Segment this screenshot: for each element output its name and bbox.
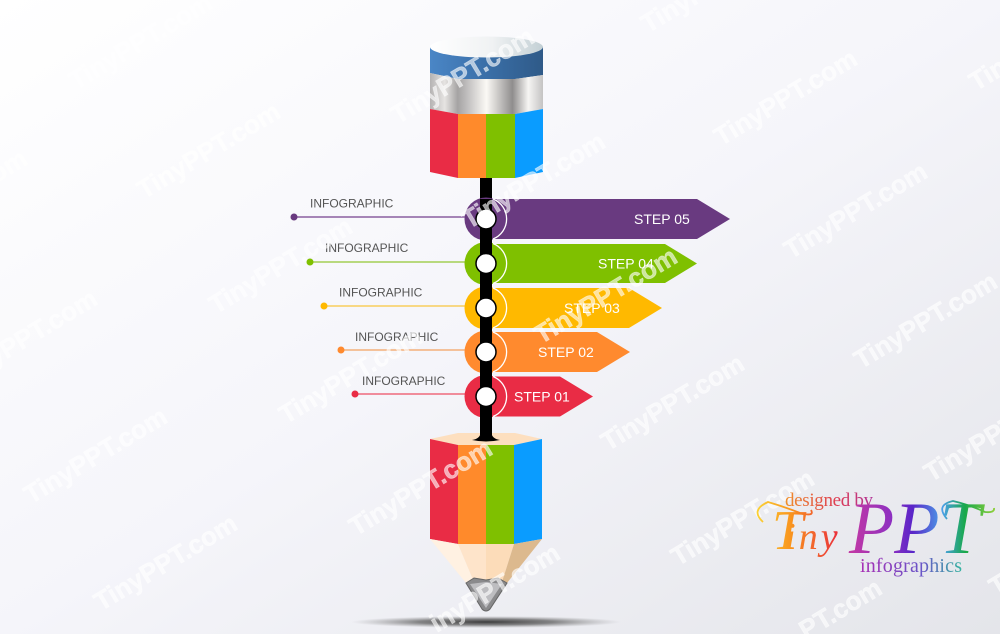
badge arc — [493, 199, 507, 239]
eraser blue band — [430, 47, 543, 79]
label: INFOGRAPHIC — [339, 286, 423, 300]
badge — [464, 286, 508, 330]
badge arc — [493, 376, 507, 416]
timeline nodes — [476, 209, 496, 406]
step 01 row — [352, 374, 593, 418]
Tiny wordmark: Tiny — [772, 500, 841, 562]
timeline spine over badges — [480, 199, 492, 435]
designed by logo — [758, 488, 994, 577]
step 03 row — [320, 286, 662, 330]
badge arc — [493, 288, 507, 328]
watermark pattern: TinyPPT.com — [18, 401, 172, 510]
label: INFOGRAPHIC — [310, 196, 394, 210]
watermark pattern: TinyPPT.com — [88, 508, 242, 617]
wood cone — [430, 539, 542, 583]
shaft end — [472, 432, 500, 442]
label: INFOGRAPHIC — [362, 374, 446, 388]
step text: STEP 05 — [634, 211, 690, 227]
arrow — [490, 244, 697, 283]
arrow — [490, 288, 662, 328]
leader dot — [290, 214, 298, 220]
leader dot — [320, 302, 328, 310]
step 05 row — [290, 196, 730, 240]
badge — [464, 375, 508, 418]
arrow — [490, 376, 593, 416]
step text: STEP 03 — [564, 300, 620, 316]
badge — [464, 330, 508, 374]
step 02 row — [338, 330, 630, 374]
eraser cap — [430, 36, 543, 58]
badge — [464, 198, 508, 240]
step text: STEP 01 — [514, 388, 570, 404]
leader dot — [338, 346, 344, 354]
watermark pattern: TinyPPT.com — [273, 321, 427, 430]
step text: STEP 04 — [598, 256, 654, 272]
watermark pattern: TinyPPT.com — [595, 348, 749, 457]
leader dot — [352, 390, 358, 398]
wood top face — [430, 433, 542, 445]
lower colored body — [430, 439, 542, 544]
top colored body — [430, 109, 543, 178]
tip highlight — [470, 582, 502, 608]
step text: STEP 02 — [538, 344, 594, 360]
leader line — [310, 261, 466, 263]
watermark pattern: TinyPPT.com — [528, 241, 682, 350]
pencil eraser top — [430, 36, 543, 178]
designed by: designed by — [785, 490, 874, 511]
badge arc — [493, 244, 507, 284]
watermark pattern: TinyPPT.com — [131, 96, 285, 205]
leader line — [294, 216, 466, 218]
graphite tip — [466, 578, 507, 611]
metal ferrule — [430, 73, 543, 114]
watermark pattern: TinyPPT.com — [848, 266, 1000, 375]
badge arc — [493, 332, 507, 372]
T flourish — [758, 502, 812, 522]
watermark pattern: TinyPPT.com — [343, 433, 497, 542]
watermark pattern: TinyPPT.com — [203, 211, 357, 320]
label: INFOGRAPHIC — [325, 241, 409, 255]
step 04 row — [306, 241, 697, 285]
watermark pattern: TinyPPT.com — [665, 463, 819, 572]
ground shadow — [351, 616, 621, 628]
badge — [464, 242, 508, 285]
leader line — [324, 305, 466, 307]
PPT wordmark: PPT — [848, 488, 985, 570]
arrow — [490, 199, 730, 239]
watermark pattern: TinyPPT.com — [778, 156, 932, 265]
arrow — [490, 332, 630, 372]
leader line — [355, 393, 466, 395]
leader line — [341, 349, 466, 351]
watermark pattern: TinyPPT.com — [456, 126, 610, 235]
pencil lower body — [430, 432, 542, 611]
pencil shaft line — [480, 175, 492, 437]
T flourish right — [942, 501, 994, 519]
watermark pattern: TinyPPT.com — [385, 21, 539, 130]
infographics: infographics — [860, 555, 962, 577]
leader dot — [306, 258, 314, 266]
label: INFOGRAPHIC — [355, 330, 439, 344]
watermark pattern: TinyPPT.com — [708, 43, 862, 152]
